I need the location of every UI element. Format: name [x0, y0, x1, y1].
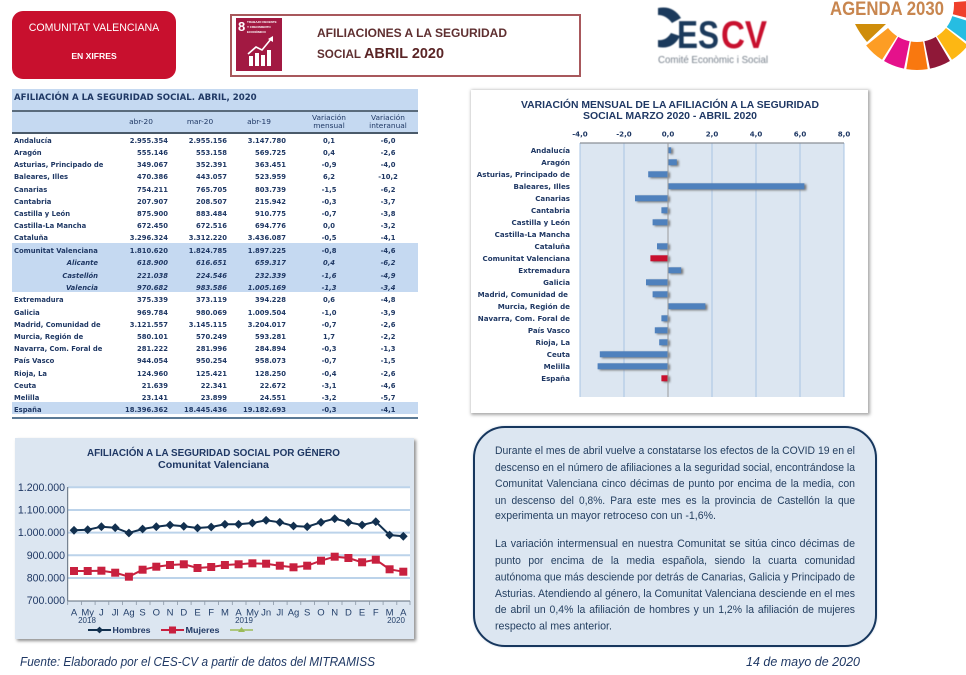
x axis labels: Ag	[123, 608, 135, 618]
category labels: Rioja, La	[536, 338, 570, 347]
y axis labels: 800.000	[27, 572, 65, 584]
table rows: -1,5	[322, 186, 336, 194]
table rows: 281.222	[137, 344, 168, 352]
legend	[88, 625, 253, 635]
table rows: 0,6	[323, 296, 335, 304]
category labels: Castilla-La Mancha	[495, 230, 570, 239]
highlighted band: Comunitat Valenciana	[12, 243, 418, 292]
icon: SDG 8 decent work: ECONÓMICO	[247, 29, 266, 34]
table rows: 883.484	[196, 210, 227, 218]
table rows: 3.121.557	[130, 320, 168, 328]
table rows: 553.158	[196, 149, 227, 157]
table rows: 3.145.115	[189, 320, 227, 328]
table rows: 3.312.220	[189, 234, 227, 242]
table rows: 969.784	[137, 308, 168, 316]
table rows: -2,6	[381, 149, 395, 157]
heading text: SOCIAL	[317, 49, 361, 61]
category labels: Madrid, Comunidad de	[478, 290, 568, 299]
plot area	[580, 143, 844, 397]
table rows: 1.824.785	[189, 247, 227, 255]
axis labels: 4,0	[750, 130, 762, 138]
commentary paragraphs: de abril un 0,4% la afiliación de hombres y un 1,2% la afiliación de mujeres	[495, 604, 855, 616]
table rows: 22.672	[260, 382, 286, 390]
header badge: Comunitat Valenciana en xifres: COMUNITAT VALENCIANA	[29, 22, 159, 34]
logo: Agenda 2030 wheel	[830, 0, 966, 70]
table rows: -0,9	[322, 161, 336, 169]
panel: line chart affiliation by gender	[15, 438, 414, 639]
table header row: mensual	[313, 121, 345, 130]
x axis labels: E	[194, 608, 201, 618]
x axis labels: A	[71, 608, 78, 618]
icon: SDG 8 decent work: 8	[238, 19, 245, 34]
table rows: Baleares, Illes	[14, 173, 68, 181]
table rows: -1,0	[322, 308, 336, 316]
table rows: 284.894	[255, 344, 286, 352]
table rows: 124.960	[137, 370, 168, 378]
table rows: Ceuta	[14, 382, 36, 390]
y axis labels	[18, 482, 65, 607]
table rows: -4,9	[381, 272, 395, 280]
table bottom rule	[12, 417, 418, 419]
table rows: -1,3	[381, 344, 395, 352]
category labels: Asturias, Principado de	[477, 170, 570, 179]
table rows: 580.101	[137, 332, 168, 340]
table rows: 375.339	[137, 296, 168, 304]
x axis labels: M	[386, 608, 394, 618]
commentary paragraphs: experimenta un mayor retroceso con un -1,6%.	[495, 510, 716, 522]
table rows: 1.005.169	[248, 284, 286, 292]
table rows: 6,2	[323, 173, 335, 181]
logo: CES CV: CV	[721, 14, 767, 57]
chart title: SOCIAL MARZO 2020 - ABRIL 2020	[583, 111, 757, 122]
line chart: Comunitat Valenciana	[158, 460, 269, 471]
table title band	[12, 89, 418, 110]
table rows: 281.996	[196, 344, 227, 352]
x axis labels: J	[99, 608, 104, 618]
x axis labels: Ag	[288, 608, 299, 618]
table rows: Extremadura	[14, 296, 64, 304]
axis labels: 6,0	[794, 130, 806, 138]
table rows: 352.391	[196, 161, 227, 169]
table rows: Navarra, Com. Foral de	[14, 344, 102, 352]
category labels: Galicia	[543, 278, 570, 287]
category labels: Aragón	[541, 158, 570, 167]
x axis labels: A	[400, 608, 407, 618]
table rows: -4,0	[381, 161, 395, 169]
table rows: 373.119	[196, 296, 227, 304]
axis labels: 8,0	[838, 130, 850, 138]
table rows: 349.067	[137, 161, 168, 169]
x axis labels: E	[359, 608, 365, 618]
table rows: 23.141	[142, 394, 168, 402]
table rows: Cantabria	[14, 198, 51, 206]
table header row: Variación	[371, 113, 405, 122]
table header row: mar-20	[187, 117, 213, 126]
table rows: -0,7	[322, 210, 336, 218]
commentary paragraphs: punto por encima de la media española, siendo la cuarta comunidad	[495, 555, 855, 567]
table rows: -2,6	[381, 370, 395, 378]
table rows: 555.146	[137, 149, 168, 157]
x axis labels: My	[81, 608, 94, 618]
table rows: 24.551	[260, 394, 286, 402]
table rows: Asturias, Principado de	[14, 161, 103, 169]
commentary paragraphs: un descenso del 0,8%. Para este mes es la provincia de Castellón la que	[495, 495, 855, 507]
x axis labels: F	[373, 608, 379, 618]
table rows: 0,4	[323, 259, 335, 267]
x axis labels: Jl	[276, 608, 283, 618]
table rows: 128.250	[255, 370, 286, 378]
table rows: 2.955.354	[130, 137, 168, 145]
x axis labels: F	[208, 608, 214, 618]
table rows: 569.725	[255, 149, 286, 157]
category labels: Ceuta	[547, 350, 570, 359]
table rows: -4,6	[381, 247, 395, 255]
table rows: 208.507	[196, 198, 227, 206]
table rows: Melilla	[14, 394, 39, 402]
plot area	[68, 487, 410, 601]
table rows: 224.546	[196, 272, 227, 280]
table rows: 618.900	[137, 259, 168, 267]
table rows: 0,4	[323, 149, 335, 157]
table rows: -3,9	[381, 308, 395, 316]
category labels: País Vasco	[528, 326, 570, 335]
table rows: 803.739	[255, 186, 286, 194]
panel: data table	[12, 89, 418, 419]
axis labels: -2,0	[616, 130, 632, 138]
legend: Hombres	[112, 625, 151, 635]
table rows: 875.900	[137, 210, 168, 218]
category labels: España	[541, 374, 570, 383]
table rows: -0,3	[322, 406, 336, 414]
table rows: -3,2	[322, 394, 336, 402]
table rows: Cataluña	[14, 234, 48, 242]
x axis labels: S	[139, 608, 146, 618]
table header row: interanual	[369, 121, 407, 130]
category labels: Comunitat Valenciana	[483, 254, 570, 263]
table rows: -4,1	[381, 406, 395, 414]
table rows: 910.775	[255, 210, 286, 218]
table rows: 659.317	[255, 259, 286, 267]
logo: CES CV	[657, 6, 768, 66]
table rows: Andalucía	[14, 137, 52, 145]
table rows: -0,3	[322, 198, 336, 206]
y axis labels: 1.000.000	[18, 527, 65, 539]
x axis labels: O	[153, 608, 160, 618]
axis labels: 0,0	[662, 130, 674, 138]
table rows: 18.445.436	[184, 406, 227, 414]
chart title: VARIACIÓN MENSUAL DE LA AFILIACIÓN A LA SEGURIDAD	[521, 98, 819, 111]
table header row	[12, 110, 418, 134]
table rows: 2.955.156	[189, 137, 227, 145]
table rows: 950.254	[196, 356, 227, 364]
bars	[598, 147, 804, 381]
table rows: -3,4	[381, 284, 395, 292]
x axis labels: D	[180, 608, 187, 618]
table rows: -4,6	[381, 382, 395, 390]
table rows: 523.959	[255, 173, 286, 181]
table rows: 23.899	[201, 394, 227, 402]
y axis labels: 1.200.000	[18, 482, 65, 494]
table rows: 694.776	[255, 222, 286, 230]
table rows: 672.516	[196, 222, 227, 230]
table rows: -0,7	[322, 356, 336, 364]
table header row: abr-20	[129, 117, 153, 126]
table rows: 232.339	[255, 272, 286, 280]
table rows: España	[14, 406, 42, 414]
y axis labels: 1.100.000	[18, 504, 65, 516]
commentary paragraphs: Comunitat Valenciana cinco décimas de punto por encima de la media, con	[495, 478, 855, 490]
table rows: -1,6	[322, 272, 336, 280]
icon: SDG 8 decent work: TRABAJO DECENTE	[247, 20, 277, 24]
table rows: 1,7	[323, 332, 335, 340]
icon: SDG 8 decent work	[236, 18, 282, 71]
chart title	[521, 98, 819, 122]
category labels: Navarra, Com. Foral de	[478, 314, 570, 323]
chart title: AFILIACIÓN A LA SEGURIDAD SOCIAL POR GÉNERO	[87, 446, 340, 459]
category labels: Andalucía	[531, 146, 570, 155]
x axis labels: O	[317, 608, 325, 618]
table rows: 944.054	[137, 356, 168, 364]
series: Mujeres	[74, 557, 403, 577]
table rows: 672.450	[137, 222, 168, 230]
table rows: 3.204.017	[248, 320, 286, 328]
table rows: 1.897.225	[248, 247, 286, 255]
table rows: -3,2	[381, 222, 395, 230]
heading text: AFILIACIONES A LA SEGURIDAD	[317, 26, 507, 40]
table rows: -2,2	[381, 332, 395, 340]
category labels: Castilla y León	[511, 218, 570, 227]
table rows: -6,2	[381, 186, 395, 194]
icon: SDG 8 decent work: Y CRECIMIENTO	[247, 25, 271, 29]
commentary paragraphs: respecto al mes anterior.	[495, 620, 612, 632]
table rows: Alicante	[67, 259, 98, 267]
table rows: 0,1	[323, 137, 335, 145]
source footnote: Fuente: Elaborado por el CES-CV a partir de datos del MITRAMISS	[20, 654, 375, 669]
table rows: Valencia	[66, 284, 98, 292]
highlighted band: España	[12, 402, 418, 414]
category labels: Melilla	[544, 362, 570, 371]
category labels: Cataluña	[534, 242, 570, 251]
commentary paragraphs: La variación intermensual en nuestra Comunitat se sitúa cinco décimas de	[495, 538, 855, 550]
category labels: Cantabria	[531, 206, 570, 215]
series: Hombres	[74, 519, 403, 536]
table rows: -3,7	[381, 198, 395, 206]
x axis labels: N	[167, 608, 174, 618]
table rows: 363.451	[255, 161, 286, 169]
table rows: 1.810.620	[130, 247, 168, 255]
table rows: 754.211	[137, 186, 168, 194]
date: 14 de mayo de 2020	[746, 654, 861, 669]
y axis labels: 700.000	[27, 595, 65, 607]
x axis labels: A	[235, 608, 242, 618]
table rows: 983.586	[196, 284, 227, 292]
category labels: Canarias	[535, 194, 570, 203]
commentary paragraphs: Durante el mes de abril vuelve a constatarse los efectos de la COVID 19 en el	[495, 445, 855, 457]
table rows: -10,2	[378, 173, 398, 181]
table rows: -3,8	[381, 210, 395, 218]
table rows: 980.069	[196, 308, 227, 316]
category labels: Murcia, Región de	[498, 302, 570, 311]
header badge: Comunitat Valenciana en xifres	[12, 11, 176, 79]
table rows: 207.907	[137, 198, 168, 206]
table rows: 18.396.362	[125, 406, 168, 414]
category labels: Baleares, Illes	[514, 182, 570, 191]
x axis labels: Jn	[261, 608, 271, 618]
table rows: Galicia	[14, 308, 40, 316]
table rows: -2,6	[381, 320, 395, 328]
table rows: Canarias	[14, 186, 47, 194]
table rows: 221.038	[137, 272, 168, 280]
header badge: Comunitat Valenciana en xifres: EN XIFRES	[71, 51, 117, 61]
table rows: 215.942	[255, 198, 286, 206]
table rows: -0,7	[322, 320, 336, 328]
axis labels: -4,0	[572, 130, 588, 138]
table rows: Aragón	[14, 149, 42, 157]
commentary paragraphs: descenso en el número de afiliaciones a la seguridad social, encontrándose la	[495, 462, 856, 474]
table title band: AFILIACIÓN A LA SEGURIDAD SOCIAL. ABRIL, 2020	[14, 93, 257, 103]
category labels: Extremadura	[518, 266, 570, 275]
axis labels: 2,0	[706, 130, 718, 138]
logo: CES CV: ES	[677, 14, 719, 57]
table rows: Castilla-La Mancha	[14, 222, 86, 230]
table rows: -4,1	[381, 234, 395, 242]
table rows: -6,2	[381, 259, 395, 267]
table rows: Castellón	[62, 272, 98, 280]
x axis labels: S	[304, 608, 310, 618]
commentary paragraphs: Asturias. Atendiendo al género, la Comunitat Valenciana desciende en el mes	[495, 588, 855, 600]
table rows: 616.651	[196, 259, 227, 267]
category labels	[477, 146, 570, 383]
table rows: 443.057	[196, 173, 227, 181]
table rows: País Vasco	[14, 356, 54, 364]
table rows: 0,0	[323, 222, 335, 230]
x axis labels: 2020	[387, 616, 405, 625]
table rows: 19.182.693	[243, 406, 286, 414]
table rows: 765.705	[196, 186, 227, 194]
table rows: 394.228	[255, 296, 286, 304]
table rows: 3.296.324	[130, 234, 168, 242]
table rows: Castilla y León	[14, 210, 70, 218]
heading box: Afiliaciones a la Seguridad Social abril 2020	[230, 14, 581, 77]
table rows: 958.073	[255, 356, 286, 364]
commentary paragraphs: autónoma que más desciende por detrás de Canarias, Galicia y Principado de	[495, 572, 855, 584]
x axis labels: M	[221, 608, 229, 618]
x axis labels: My	[246, 608, 259, 618]
panel: bar chart monthly variation	[471, 90, 868, 413]
x axis labels: D	[345, 608, 352, 618]
table rows: Rioja, La	[14, 370, 47, 378]
bar chart	[476, 98, 850, 397]
table rows: 3.147.780	[248, 137, 286, 145]
table rows: -1,3	[322, 284, 336, 292]
legend: Mujeres	[186, 625, 220, 635]
table rows: 21.639	[142, 382, 168, 390]
table header row: abr-19	[247, 117, 271, 126]
table rows: Murcia, Región de	[14, 332, 83, 340]
x axis labels: 2019	[235, 616, 253, 625]
table rows: -0,3	[322, 344, 336, 352]
table rows: -0,4	[322, 370, 336, 378]
table rows: -5,7	[381, 394, 395, 402]
axis labels	[572, 130, 850, 138]
y axis labels: 900.000	[27, 550, 65, 562]
x axis labels	[71, 608, 407, 625]
x axis labels: N	[331, 608, 338, 618]
table rows: 570.249	[196, 332, 227, 340]
table rows: 470.386	[137, 173, 168, 181]
table rows: -3,1	[322, 382, 336, 390]
heading text	[317, 26, 507, 62]
table rows: -0,8	[322, 247, 336, 255]
table rows: -0,5	[322, 234, 336, 242]
table rows: Madrid, Comunidad de	[14, 320, 101, 328]
table rows: Comunitat Valenciana	[14, 247, 98, 255]
callout: commentary text	[473, 426, 877, 647]
table rows	[14, 137, 398, 414]
table rows: 22.341	[201, 382, 227, 390]
table rows: 125.421	[196, 370, 227, 378]
table rows: -6,0	[381, 137, 395, 145]
table rows: 970.682	[137, 284, 168, 292]
table rows: -1,5	[381, 356, 395, 364]
table rows: 1.009.504	[248, 308, 286, 316]
table rows: -4,8	[381, 296, 395, 304]
line chart	[18, 446, 410, 635]
table rows: 3.436.087	[248, 234, 286, 242]
table header row: Variación	[312, 113, 346, 122]
x axis labels: 2018	[78, 616, 96, 625]
logo: CES CV: Comité Econòmic i Social	[658, 54, 768, 66]
x axis labels: Jl	[112, 608, 119, 618]
table rows: 593.281	[255, 332, 286, 340]
heading text: ABRIL 2020	[364, 45, 444, 62]
